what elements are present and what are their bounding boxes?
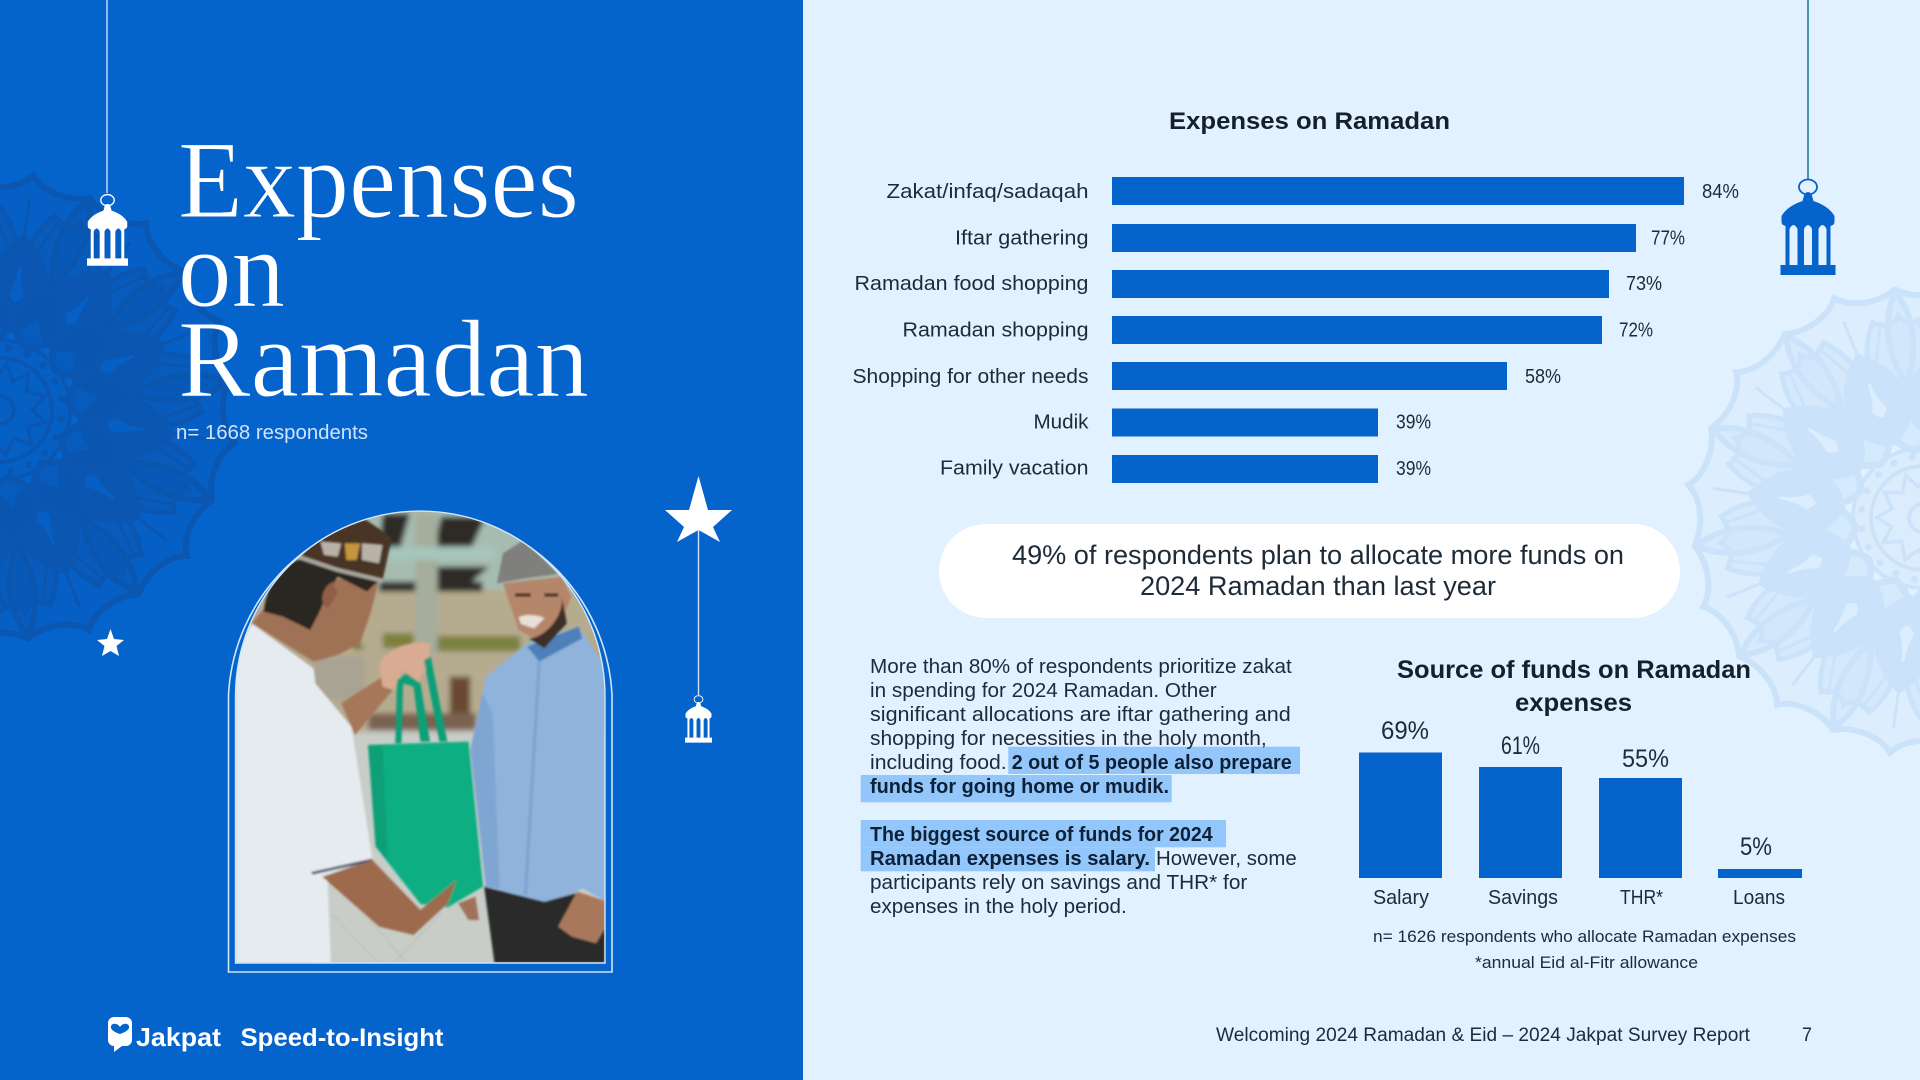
icon: right hanging lantern <box>1780 0 1836 275</box>
text block: summary paragraphs: funds for going home or mudik. <box>870 776 1169 798</box>
bag handles <box>395 657 447 743</box>
row: Ramadan shopping: 72% <box>1619 318 1653 342</box>
right man head <box>503 577 571 641</box>
chart heading: source of funds <box>1397 656 1751 717</box>
row: Iftar: 77% <box>1651 226 1685 250</box>
right man shirt <box>470 627 605 902</box>
column: Salary <box>1359 717 1442 909</box>
footnotes: n= 1626 respondents who allocate Ramadan expenses <box>1373 927 1796 946</box>
photo: two men exchanging a green bag in an arched frame <box>228 505 612 972</box>
column: Savings: Savings <box>1488 886 1558 909</box>
left man shirt <box>235 623 372 963</box>
callout: 49% of respondents <box>939 524 1680 618</box>
text block: summary paragraphs: 2 out of 5 people also prepare <box>1012 752 1292 774</box>
title <box>178 119 589 420</box>
row: Ramadan shopping <box>902 316 1653 344</box>
forearm and hand <box>341 677 393 735</box>
icon: large star with hanging lantern <box>665 476 732 743</box>
footer: page number: 7 <box>1802 1025 1812 1046</box>
decoration: left mandala <box>0 142 268 678</box>
row: other needs: Shopping for other needs <box>852 365 1088 388</box>
left man hat <box>300 519 392 581</box>
bag body <box>368 742 483 907</box>
callout: 49% of respondents: 2024 Ramadan than last year <box>1140 571 1496 601</box>
bar chart: source of funds <box>1359 717 1802 909</box>
row: Family vacation <box>940 455 1431 483</box>
column: THR: 55% <box>1622 745 1669 773</box>
row: Zakat <box>886 177 1739 205</box>
column: Salary: 69% <box>1381 717 1429 745</box>
row: Mudik: Mudik <box>1034 410 1089 434</box>
bar chart: expenses on Ramadan <box>852 177 1739 483</box>
icon: small star <box>97 629 124 656</box>
chart heading: source of funds: expenses <box>1515 689 1632 717</box>
right man hat <box>497 540 558 583</box>
lower arm <box>322 860 457 935</box>
column: Savings <box>1479 732 1562 909</box>
text block: summary paragraphs: significant allocations are iftar gathering and <box>870 704 1291 726</box>
row: Family vacation: 39% <box>1396 457 1431 480</box>
chart heading: source of funds: Source of funds on Ramadan <box>1397 656 1751 684</box>
respondent count: n= 1668 respondents <box>176 422 368 444</box>
text block: summary paragraphs: Ramadan expenses is salary. <box>870 848 1150 870</box>
row: Iftar <box>955 224 1685 252</box>
row: other needs: 58% <box>1525 365 1561 388</box>
left man neck head <box>252 577 379 662</box>
row: food shopping: Ramadan food shopping <box>854 272 1088 295</box>
text block: summary paragraphs: participants rely on savings and THR* for <box>870 872 1248 894</box>
row: Mudik <box>1034 408 1431 436</box>
row: Mudik: 39% <box>1396 410 1431 434</box>
decoration: right mandala <box>1655 250 1920 786</box>
row: Family vacation: Family vacation <box>940 456 1088 480</box>
footer: report name: Welcoming 2024 Ramadan & Eid – 2024 Jakpat Survey Report <box>1216 1025 1751 1046</box>
column: Loans: 5% <box>1740 833 1772 861</box>
column: Salary: Salary <box>1373 886 1430 909</box>
right man trousers <box>484 887 605 963</box>
panel: right light background <box>803 0 1920 1080</box>
text block: summary paragraphs: expenses in the holy period. <box>870 896 1127 918</box>
row: food shopping: 73% <box>1626 272 1662 295</box>
row: Zakat: 84% <box>1702 180 1739 203</box>
icon: left hanging lantern <box>87 0 128 266</box>
row: Iftar: Iftar gathering <box>955 226 1088 250</box>
text block: summary paragraphs: The biggest source of funds for 2024 <box>870 824 1214 846</box>
callout: 49% of respondents: 49% of respondents plan to allocate more funds on <box>1012 540 1624 570</box>
title: Expenses <box>178 119 579 241</box>
column: THR: THR* <box>1620 886 1663 909</box>
tagline: Speed-to-Insight <box>240 1024 444 1052</box>
text block: summary paragraphs: including food. <box>870 752 1007 774</box>
text block: summary paragraphs: However, some <box>1156 848 1297 870</box>
text block: summary paragraphs <box>861 656 1300 918</box>
panel: left blue background <box>0 0 803 1080</box>
title: Ramadan <box>178 298 589 420</box>
column: THR <box>1599 745 1682 909</box>
title: on <box>178 208 285 330</box>
row: Zakat: Zakat/infaq/sadaqah <box>886 180 1088 203</box>
column: Loans: Loans <box>1733 886 1785 909</box>
column: Savings: 61% <box>1501 732 1540 760</box>
right man hands <box>458 897 479 920</box>
row: Ramadan shopping: Ramadan shopping <box>902 318 1088 342</box>
chart heading: expenses on Ramadan: Expenses on Ramadan <box>1169 108 1450 135</box>
column: Loans <box>1718 833 1802 909</box>
logo: Jakpat: Jakpat <box>136 1022 221 1052</box>
text block: summary paragraphs: More than 80% of respondents prioritize zakat <box>870 656 1292 678</box>
logo: Jakpat <box>108 1017 221 1052</box>
row: other needs <box>852 362 1561 390</box>
text block: summary paragraphs: in spending for 2024 Ramadan. Other <box>870 680 1217 702</box>
footnotes: *annual Eid al-Fitr allowance <box>1475 953 1698 972</box>
row: food shopping <box>854 270 1662 298</box>
footnotes <box>1373 927 1796 972</box>
text block: summary paragraphs: shopping for necessities in the holy month, <box>870 728 1267 750</box>
